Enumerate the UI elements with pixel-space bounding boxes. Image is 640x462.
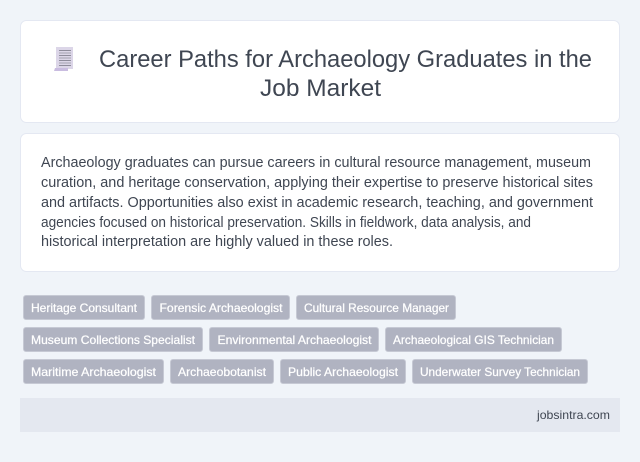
icon: scroll document — [54, 47, 73, 71]
tag: Museum Collections Specialist: Museum Collections Specialist — [31, 333, 196, 347]
tag: Underwater Survey Technician — [412, 360, 588, 384]
description text: and artifacts. Opportunities also exist in academic research, teaching, and government — [41, 195, 593, 211]
footer bar — [20, 398, 620, 432]
description text: Archaeology graduates can pursue careers in cultural resource management, museum — [41, 155, 591, 171]
panel: title header — [20, 20, 620, 122]
tag: Cultural Resource Manager: Cultural Resource Manager — [304, 301, 449, 315]
description text — [41, 155, 593, 250]
tag list — [24, 296, 588, 384]
tag: Heritage Consultant: Heritage Consultant — [31, 301, 138, 315]
tag: Public Archaeologist: Public Archaeologist — [288, 365, 399, 379]
tag: Heritage Consultant — [24, 296, 144, 320]
description text: curation, and heritage conservation, applying their expertise to preserve historical sites — [41, 175, 593, 191]
footer source text: jobsintra.com — [536, 408, 610, 422]
tag: Archaeological GIS Technician — [386, 328, 562, 352]
panel: description — [20, 134, 620, 272]
tag: Cultural Resource Manager — [296, 296, 456, 320]
tag: Environmental Archaeologist — [210, 328, 378, 352]
tag: Archaeobotanist — [170, 360, 274, 384]
title: Career Paths for Archaeology Graduates in the — [99, 46, 592, 73]
title — [99, 46, 592, 102]
tag: Public Archaeologist — [280, 360, 406, 384]
tag: Underwater Survey Technician: Underwater Survey Technician — [420, 365, 580, 379]
tag: Museum Collections Specialist — [24, 328, 202, 352]
description text: historical interpretation are highly valued in these roles. — [41, 234, 393, 250]
tag: Maritime Archaeologist: Maritime Archaeologist — [31, 365, 157, 379]
description text: agencies focused on historical preservation. Skills in fieldwork, data analysis, and — [41, 215, 531, 231]
tag: Maritime Archaeologist — [24, 360, 164, 384]
tag: Environmental Archaeologist: Environmental Archaeologist — [218, 333, 372, 347]
tag: Forensic Archaeologist: Forensic Archaeologist — [160, 301, 283, 315]
title: Job Market — [260, 75, 381, 102]
tag: Archaeobotanist: Archaeobotanist — [178, 365, 267, 379]
tag: Archaeological GIS Technician: Archaeological GIS Technician — [393, 333, 554, 347]
tag: Forensic Archaeologist — [152, 296, 290, 320]
